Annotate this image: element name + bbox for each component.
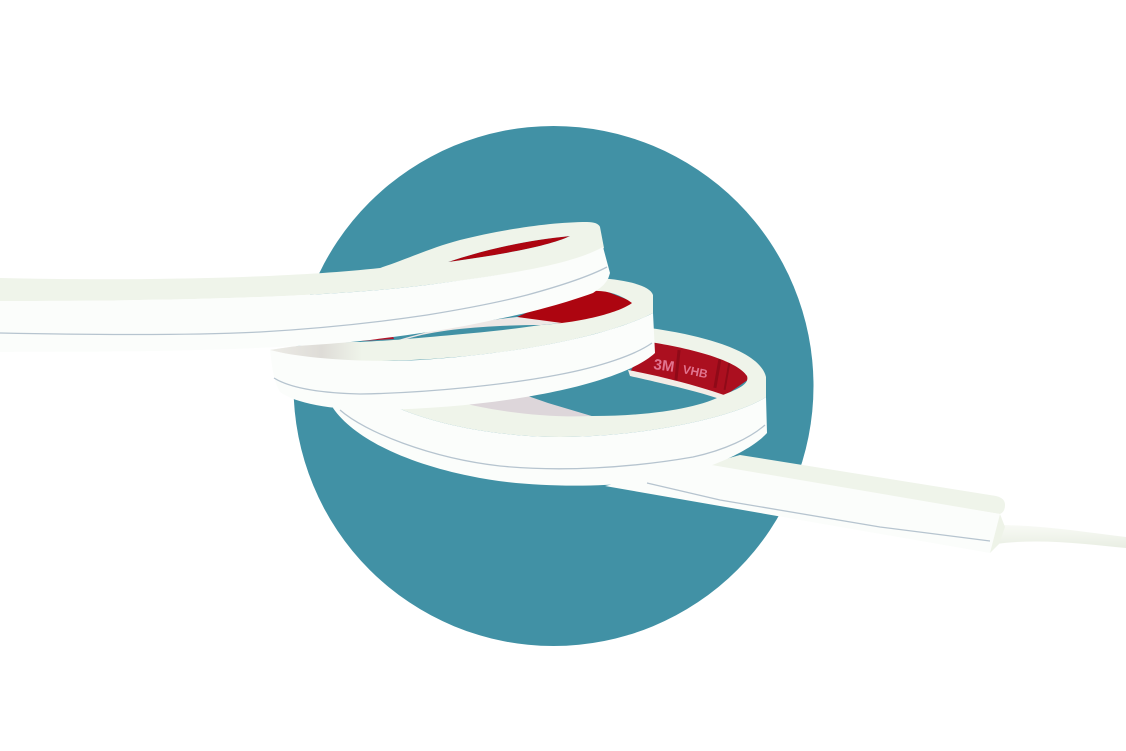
middle loop xyxy=(270,278,655,410)
adhesive dark stripes xyxy=(674,350,730,390)
lower loop xyxy=(333,328,767,486)
tail strip and cable xyxy=(605,455,1126,553)
middle loop LED line xyxy=(274,343,652,394)
middle loop top band xyxy=(270,278,653,361)
upper loop and long strip xyxy=(0,222,610,352)
upper loop LED line xyxy=(0,267,607,334)
lower loop LED line xyxy=(340,410,765,469)
tail top band xyxy=(700,455,1005,514)
upper loop front face xyxy=(0,247,610,352)
middle loop front face xyxy=(270,313,655,410)
cable xyxy=(996,525,1126,548)
lower loop rim xyxy=(628,370,724,399)
lower loop red adhesive xyxy=(630,338,752,397)
lower loop front face xyxy=(333,397,767,486)
adhesive print: 3M VHB xyxy=(652,356,709,381)
middle loop red adhesive xyxy=(517,285,636,324)
adhesive print: 3M VHB: 3M xyxy=(652,356,675,376)
teal circle xyxy=(294,126,814,646)
tail LED line xyxy=(647,483,990,541)
adhesive print: 3M VHB: VHB xyxy=(681,362,709,381)
tail cap xyxy=(990,514,1005,553)
tail front face xyxy=(605,463,1000,553)
lower loop shadowed inner side xyxy=(440,395,595,418)
upper loop red adhesive xyxy=(448,236,570,262)
lower loop top band xyxy=(385,328,766,437)
upper loop top band xyxy=(0,222,604,301)
middle loop shaded left band xyxy=(270,342,362,362)
middle loop inner rim xyxy=(392,317,562,342)
middle loop red sliver xyxy=(360,334,394,341)
